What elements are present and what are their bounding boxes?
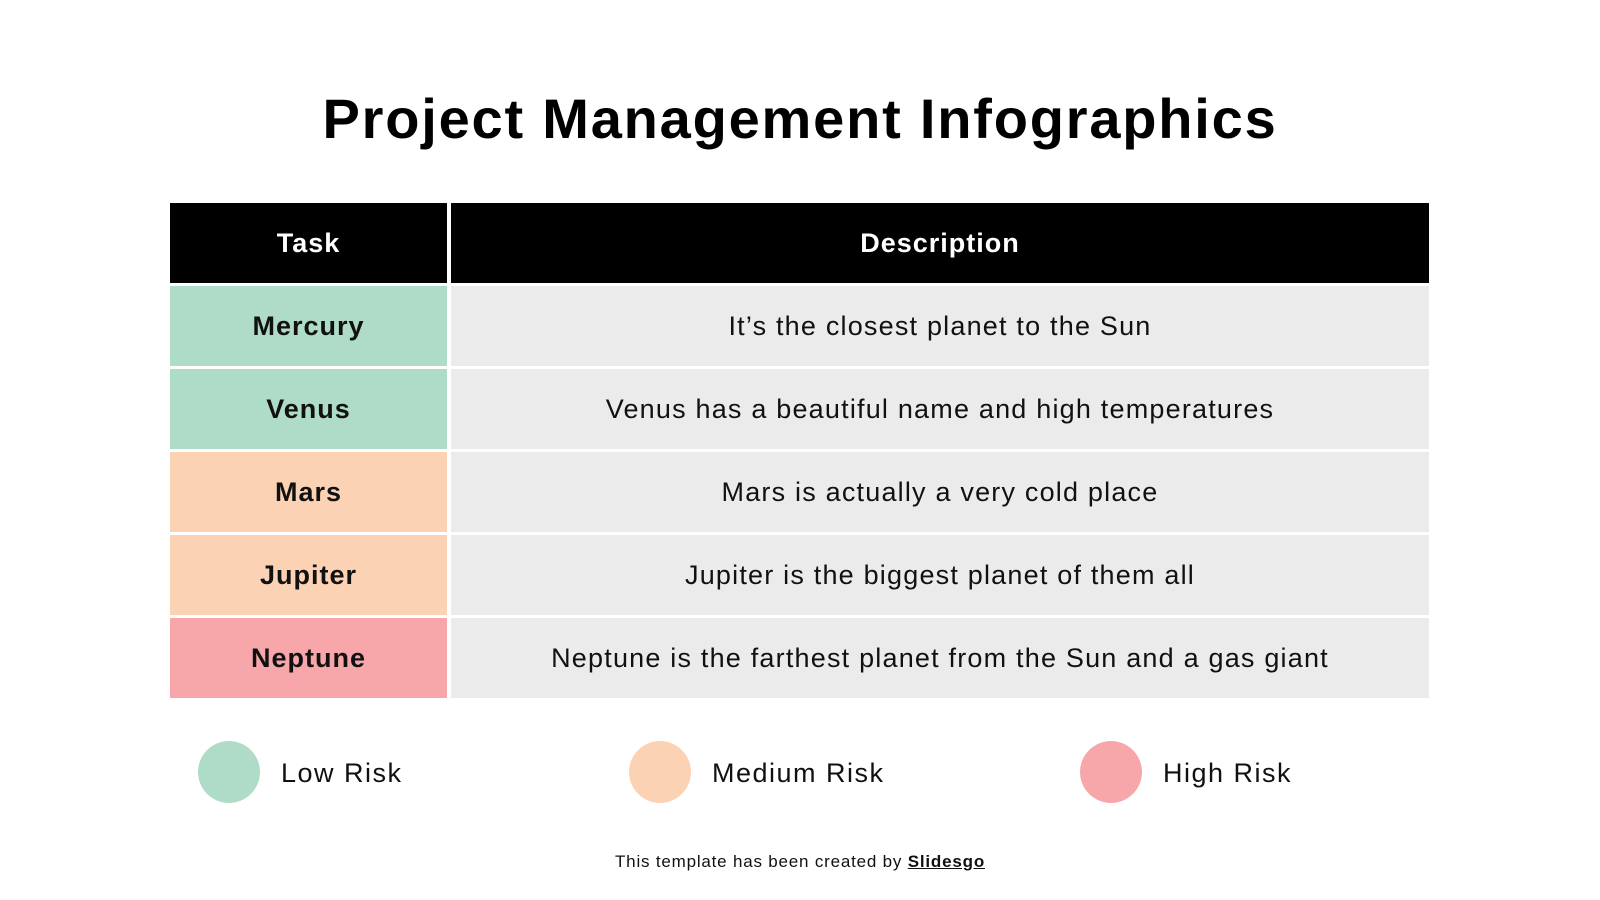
table [170, 203, 1429, 283]
row: mars: Mars [275, 476, 342, 506]
row: neptune [170, 618, 1429, 698]
legend: high risk: High Risk [1163, 758, 1292, 788]
legend: high risk [1080, 741, 1292, 803]
legend: medium risk: Medium Risk [712, 758, 885, 788]
header: description [451, 203, 1429, 283]
row: neptune: Neptune is the farthest planet from the Sun and a gas giant [551, 642, 1329, 672]
row: venus: Venus has a beautiful name and high temperatures [606, 394, 1274, 424]
title: Project Management Infographics [322, 87, 1278, 150]
row: mercury: Mercury [252, 310, 365, 340]
row: venus: Venus [266, 394, 351, 424]
row: jupiter: Jupiter is the biggest planet of them all [685, 560, 1195, 590]
legend: medium risk [629, 741, 885, 803]
legend: low risk: Low Risk [281, 758, 403, 788]
header: description: Description [860, 228, 1020, 258]
footer credit: This template has been created by Slidesgo [615, 852, 985, 871]
row: mercury: It’s the closest planet to the Sun [728, 310, 1152, 340]
row: mercury [170, 286, 1429, 366]
row: jupiter [170, 535, 1429, 615]
legend: low risk [198, 741, 403, 803]
row: jupiter: Jupiter [260, 560, 357, 590]
row: mars: Mars is actually a very cold place [722, 476, 1158, 506]
row: neptune: Neptune [251, 642, 366, 672]
header: task: Task [277, 228, 340, 258]
row: venus [170, 369, 1429, 449]
header: task [170, 203, 447, 283]
row: mars [170, 452, 1429, 532]
